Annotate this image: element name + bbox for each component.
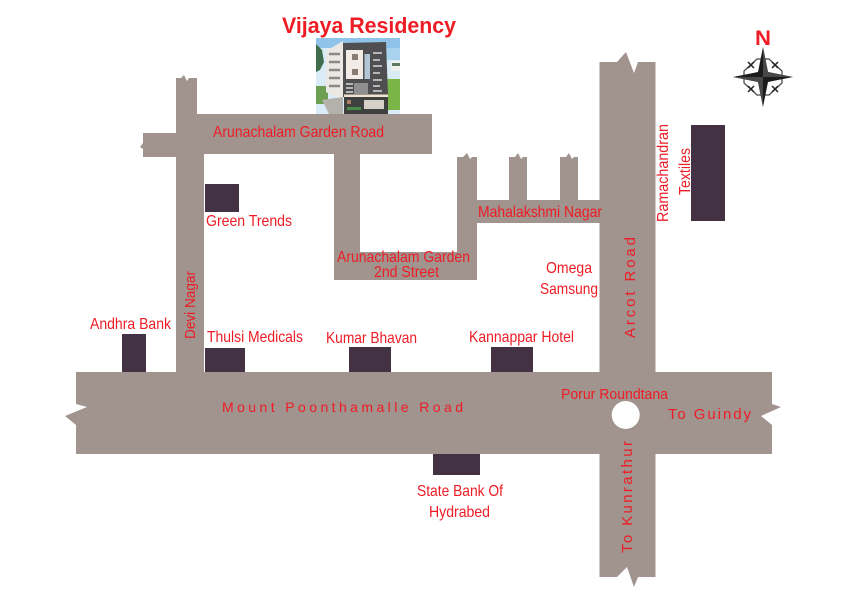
building: Kumar Bhavan	[349, 347, 391, 372]
label: Textiles: Textiles	[677, 148, 694, 195]
title: Vijaya Residency	[282, 13, 457, 38]
building: Ramachandran Textiles	[691, 125, 725, 221]
building: State Bank	[433, 454, 480, 475]
road: Mount Poonthamalle Road	[65, 372, 781, 454]
label: Ramachandran: Ramachandran	[655, 124, 672, 222]
label: State Bank Of Hydrabed	[417, 483, 503, 521]
road: Arcot Road and To Kunrathur	[600, 52, 656, 587]
label: Arcot Road: Arcot Road	[622, 237, 639, 338]
Porur roundabout	[612, 401, 640, 429]
building: Green Trends	[205, 184, 239, 212]
compass letter N: N	[755, 27, 771, 50]
label: Kannappar Hotel: Kannappar Hotel	[469, 329, 574, 346]
label: Omega Samsung	[540, 260, 598, 298]
icon: compass rose	[733, 47, 793, 107]
label: Mahalakshmi Nagar: Mahalakshmi Nagar	[478, 204, 603, 221]
label: Green Trends: Green Trends	[206, 213, 292, 230]
label: To Guindy: To Guindy	[668, 406, 752, 423]
label: Arunachalam Garden 2nd Street	[337, 249, 470, 281]
building: Kannappar Hotel	[491, 347, 533, 372]
building: Thulsi Medicals	[205, 348, 245, 372]
label: State Bank Of Hydrabed: State Bank Of	[417, 483, 503, 500]
label: Mount Poonthamalle Road: Mount Poonthamalle Road	[222, 399, 463, 415]
label: Devi Nagar: Devi Nagar	[182, 271, 199, 339]
road network	[65, 52, 781, 587]
label: Thulsi Medicals: Thulsi Medicals	[207, 329, 303, 346]
building photo	[316, 38, 400, 114]
road: Arunachalam Garden 2nd Street	[334, 150, 603, 280]
label: Arunachalam Garden 2nd Street: 2nd Street	[374, 264, 439, 281]
building: Andhra Bank	[122, 334, 146, 372]
label: Omega Samsung: Omega	[546, 260, 592, 277]
label: Andhra Bank: Andhra Bank	[90, 316, 172, 333]
road: Arunachalam Garden Road	[190, 114, 432, 154]
label: Kumar Bhavan: Kumar Bhavan	[326, 330, 417, 347]
label: Arunachalam Garden 2nd Street: Arunachalam Garden	[337, 249, 470, 266]
label: Porur Roundtana: Porur Roundtana	[561, 386, 669, 403]
label: State Bank Of Hydrabed: Hydrabed	[429, 504, 490, 521]
label: To Kunrathur: To Kunrathur	[619, 441, 636, 553]
label: Arunachalam Garden Road: Arunachalam Garden Road	[213, 124, 384, 141]
label: Omega Samsung: Samsung	[540, 281, 598, 298]
road: Devi Nagar	[140, 75, 204, 376]
